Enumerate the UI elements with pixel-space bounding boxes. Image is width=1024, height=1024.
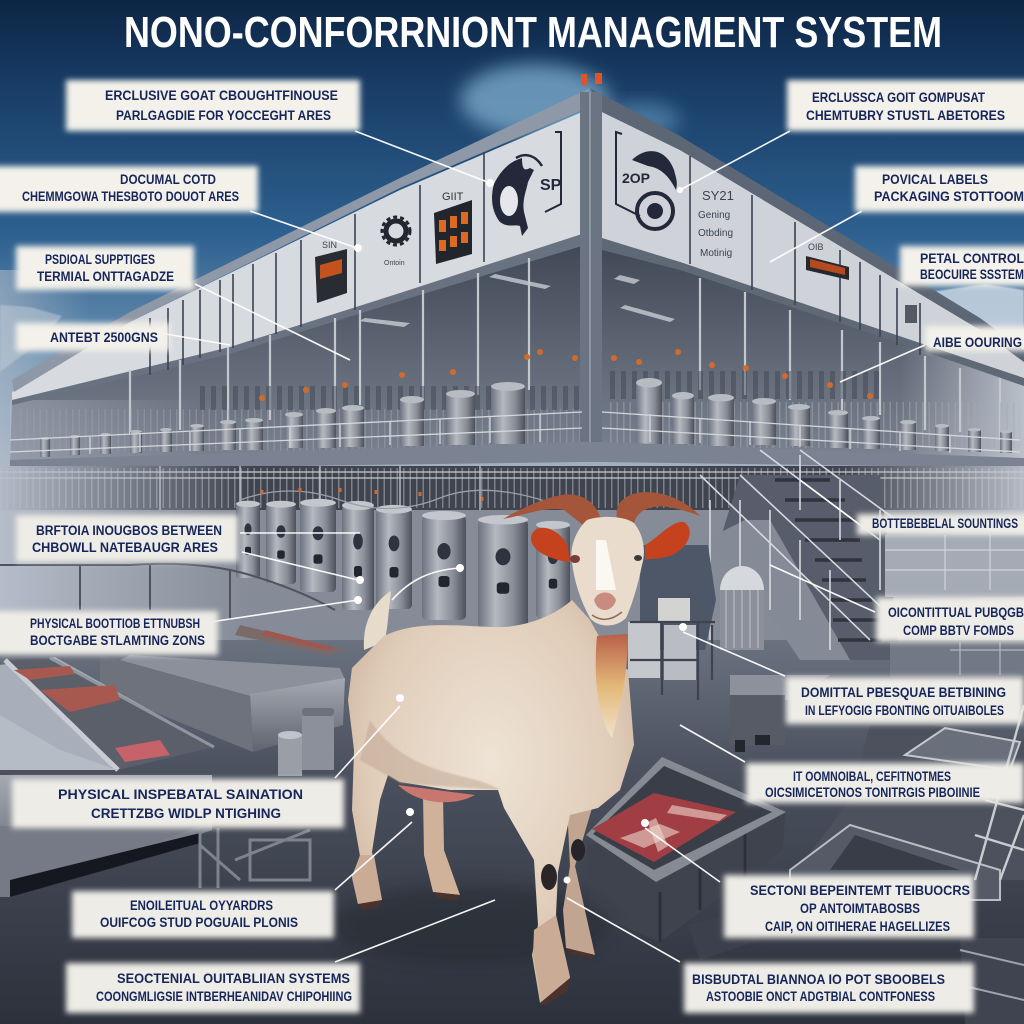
muzzle: [594, 592, 616, 610]
callout label 6: POVICAL LABELS: [882, 172, 988, 187]
roof beacons: [581, 73, 602, 85]
callout label 16: [786, 677, 1024, 724]
sign logo left goat: SP: [540, 177, 562, 194]
sign logo right goat: 2OP: [622, 170, 650, 186]
floor shadow: [330, 885, 610, 965]
mouth: [592, 612, 622, 619]
callout label 3: PSDIOAL SUPPTIGES: [45, 252, 155, 267]
callout label 9: [16, 515, 238, 562]
goat: [330, 492, 700, 1006]
horn right: [617, 492, 700, 526]
sign logo left goat: [492, 132, 562, 236]
steel waste bins: [278, 708, 334, 776]
udder: [398, 785, 475, 802]
ground floor: [0, 640, 1024, 1024]
panel seams: [150, 152, 920, 375]
sign text right panel: Gening: [698, 210, 730, 221]
far end haze on glass: [900, 345, 1024, 462]
roof edge: [12, 88, 590, 392]
meat crate: [586, 757, 786, 942]
valves upper floor: [259, 349, 873, 401]
callout label 2: [0, 166, 258, 212]
gear icon: [382, 217, 410, 267]
callout label 2: DOCUMAL COTD: [120, 172, 216, 187]
callout label 17: IT OOMNOIBAL, CEFITNOTMES: [793, 769, 951, 784]
callout label 5: ERCLUSSCA GOIT GOMPUSAT: [812, 90, 986, 105]
lower left conveyor: [0, 564, 335, 620]
callout label 11: CRETTZBG WIDLP NTIGHING: [91, 806, 281, 821]
callout label 2: CHEMMGOWA THESBOTO DOUOT ARES: [22, 189, 239, 204]
callout label 9: BRFTOIA INOUGBOS BETWEEN: [36, 523, 222, 538]
callout label 13: COONGMLIGSIE INTBERHEANIDAV CHIPOHIING: [96, 989, 352, 1004]
callout label 4: [16, 323, 170, 351]
face blaze: [596, 540, 616, 590]
callout label 12: [72, 891, 334, 938]
vessel by the stairs: [720, 566, 764, 650]
right steel bench: [730, 675, 830, 752]
dense upper equipment: [20, 385, 1020, 430]
callout label 13: [66, 963, 360, 1013]
body shading: [360, 720, 500, 790]
callout label 16: DOMITTAL PBESQUAE BETBINING: [801, 685, 1006, 700]
display panel left large: GIIT: [442, 191, 464, 203]
callout label 11: [12, 779, 344, 828]
display panel right small: [806, 242, 849, 280]
callout label 18: OP ANTOIMTABOSBS: [800, 901, 920, 916]
building upper floor: [10, 73, 1024, 470]
callout label 12: ENOILEITUAL OYYARDRS: [130, 898, 273, 913]
sign band right: [602, 112, 1024, 380]
pipework over tanks: [240, 488, 570, 510]
sign text right panel: [698, 188, 734, 259]
ear right: [645, 522, 690, 560]
leader lines: [160, 131, 925, 962]
display panel left small: [315, 240, 347, 303]
callout label 14: [857, 514, 1024, 535]
lower floor interior: [0, 466, 1024, 656]
callout label 11: PHYSICAL INSPEBATAL SAINATION: [58, 787, 303, 802]
horn left: [503, 494, 600, 525]
callout label 19: ASTOOBIE ONCT ADGTBIAL CONTFONESS: [706, 989, 935, 1004]
hoof tips: [358, 892, 595, 1006]
tail: [364, 591, 391, 650]
callout label 6: [855, 166, 1024, 212]
display panel right small: OIB: [808, 242, 824, 252]
sign text right panel: Motinig: [700, 248, 732, 259]
staircase: [700, 450, 910, 660]
callout label 10: PHYSICAL BOOTTIOB ETTNUBSH: [30, 616, 200, 631]
callout label 5: [787, 80, 1024, 131]
callout label 3: [16, 246, 194, 290]
callout label 9: CHBOWLL NATEBAUGR ARES: [32, 540, 218, 555]
callout label 18: [724, 875, 974, 938]
callout label 10: [0, 611, 218, 655]
display panel far right: [905, 305, 917, 323]
callout label 8: [925, 326, 1024, 351]
floor slab: [10, 442, 1024, 470]
callout label 19: BISBUDTAL BIANNOA IO POT SBOOBELS: [692, 972, 945, 987]
eyes: [570, 555, 642, 563]
upper balcony railing: [10, 412, 1020, 454]
sign band lower beam: [12, 234, 582, 405]
callout label 13: SEOCTENIAL OUITABLIIAN SYSTEMS: [117, 971, 350, 986]
upper tanks left: [40, 382, 525, 457]
cart: [628, 598, 715, 700]
callout label 5: CHEMTUBRY STUSTL ABETORES: [806, 108, 1005, 123]
display panel left large: [434, 191, 472, 264]
sign logo right goat: [616, 132, 677, 229]
beard: [596, 634, 628, 738]
gear icon: Ontoin: [384, 260, 405, 267]
callout label 18: CAIP, ON OITIHERAE HAGELLIZES: [765, 919, 950, 934]
right low sinks: [688, 705, 1024, 1024]
knee mark: [541, 864, 557, 890]
callout label 10: BOCTGABE STLAMTING ZONS: [30, 633, 205, 648]
lower tanks: [236, 499, 570, 628]
callout label 4: ANTEBT 2500GNS: [50, 330, 158, 345]
sky background: [0, 0, 1024, 470]
steel table front left: [0, 657, 214, 897]
glass wall right: [602, 240, 1024, 462]
ceiling lights: [359, 274, 675, 327]
callout label 1: PARLGAGDIE FOR YOCCEGHT ARES: [116, 108, 331, 123]
far legs: [423, 795, 460, 895]
steel table back left: [100, 625, 345, 752]
callout label 1: ERCLUSIVE GOAT CBOUGHTFINOUSE: [105, 88, 338, 103]
sign text right panel: SY21: [702, 188, 734, 203]
columns on upper floor: [130, 258, 1000, 440]
right background machines: [885, 535, 1024, 678]
callout label 18: SECTONI BEPEINTEMT TEIBUOCRS: [750, 883, 970, 898]
sign text right panel: Otbding: [698, 228, 733, 239]
callout label 12: OUIFCOG STUD POGUAIL PLONIS: [100, 915, 298, 930]
hooves and lower leg tone: [352, 855, 570, 1002]
callout label 3: TERMIAL ONTTAGADZE: [37, 269, 174, 284]
callout label 19: [684, 963, 974, 1013]
leader dots: [354, 179, 687, 884]
ear left: [531, 528, 570, 562]
head: [571, 517, 644, 626]
tiled wall behind goat: [640, 545, 716, 650]
callout label 15: [876, 597, 1024, 642]
body and legs: [348, 600, 634, 1003]
callout label 17: OICSIMICETONOS TONITRGIS PIBOIINIE: [765, 785, 980, 800]
callout label 7: [900, 246, 1024, 286]
sign band left: [12, 112, 582, 402]
glass wall left: [10, 238, 582, 464]
callout label 17: [746, 763, 1024, 803]
corner column: [580, 92, 602, 444]
upper tanks right: [636, 378, 1012, 453]
display panel left small: SIN: [322, 240, 337, 250]
small machine frame: [200, 828, 310, 888]
callout label 1: [66, 80, 360, 131]
